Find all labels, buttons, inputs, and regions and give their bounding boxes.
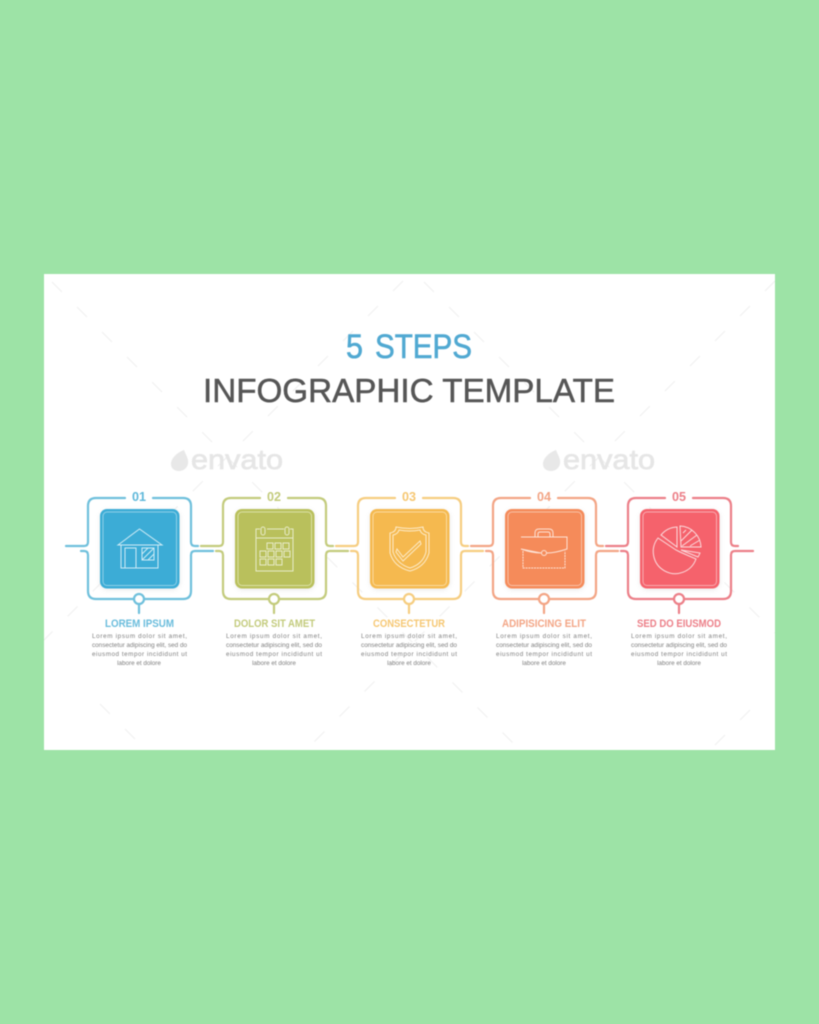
step 4 description: Lorem ipsum dolor sit amet, [496, 633, 592, 640]
step 2 description [226, 633, 322, 667]
step 1 description: Lorem ipsum dolor sit amet, [92, 633, 187, 640]
step 2 tile [235, 509, 315, 590]
icon: briefcase [521, 529, 567, 568]
step 4 [471, 489, 618, 667]
icon: shield with check [390, 527, 429, 571]
step 2 frame [201, 498, 348, 613]
step 4 description: eiusmod tempor incididunt ut [496, 651, 592, 658]
step 3 description: consectetur adipiscing elit, sed do [361, 642, 457, 649]
icon: house [118, 529, 162, 568]
step 1 frame [66, 498, 213, 613]
step 5 description [631, 633, 727, 667]
step 3 description: eiusmod tempor incididunt ut [361, 651, 457, 658]
icon: calendar [256, 527, 293, 571]
step 2 number: 02 [267, 489, 281, 504]
background panel [44, 274, 775, 750]
step 5 description: eiusmod tempor incididunt ut [631, 651, 727, 658]
step 3 number: 03 [402, 489, 416, 504]
step 3 tile [370, 509, 450, 590]
step 2 description: Lorem ipsum dolor sit amet, [226, 633, 322, 640]
step 3 [336, 489, 483, 667]
step 5 [606, 489, 753, 667]
title: 5 steps: 5 [346, 328, 363, 366]
step 1 description [92, 633, 187, 667]
watermark: envato right: envato [563, 444, 655, 475]
step 1 description: labore et dolore [117, 660, 161, 667]
step 5 label: SED DO EIUSMOD [637, 618, 721, 630]
step 4 description: labore et dolore [522, 660, 566, 667]
step 5 number: 05 [672, 489, 686, 504]
step 5 description: labore et dolore [657, 660, 701, 667]
step 1 tile [100, 509, 180, 590]
step 1 label: LOREM IPSUM [105, 618, 174, 630]
step 5 description: consectetur adipiscing elit, sed do [631, 642, 727, 649]
step 1 description: consectetur adipiscing elit, sed do [92, 642, 187, 649]
step 3 frame [336, 498, 483, 613]
step 2 description: labore et dolore [252, 660, 296, 667]
step 1 [66, 489, 213, 667]
step 1 number: 01 [132, 489, 146, 504]
step 2 label: DOLOR SIT AMET [234, 618, 315, 630]
step 4 description [496, 633, 592, 667]
step 4 frame [471, 498, 618, 613]
step 3 description: labore et dolore [387, 660, 431, 667]
icon: pie chart [653, 526, 701, 574]
step 5 frame [606, 498, 753, 613]
title: 5 steps: STEPS [375, 328, 472, 366]
step 3 label: CONSECTETUR [373, 618, 445, 630]
step 4 description: consectetur adipiscing elit, sed do [496, 642, 592, 649]
step 1 description: eiusmod tempor incididunt ut [92, 651, 187, 658]
title: infographic template: INFOGRAPHIC TEMPLATE [203, 372, 615, 409]
step 4 label: ADIPISICING ELIT [502, 618, 586, 630]
step 4 tile [505, 509, 585, 590]
step 2 description: consectetur adipiscing elit, sed do [226, 642, 322, 649]
step 2 description: eiusmod tempor incididunt ut [226, 651, 322, 658]
step 2 [201, 489, 348, 667]
step 3 description [361, 633, 457, 667]
step 4 number: 04 [537, 489, 552, 504]
watermark: envato left: envato [191, 444, 283, 475]
step 3 description: Lorem ipsum dolor sit amet, [361, 633, 457, 640]
step 5 tile [640, 509, 720, 590]
title: 5 steps [346, 328, 472, 366]
step 5 description: Lorem ipsum dolor sit amet, [631, 633, 727, 640]
